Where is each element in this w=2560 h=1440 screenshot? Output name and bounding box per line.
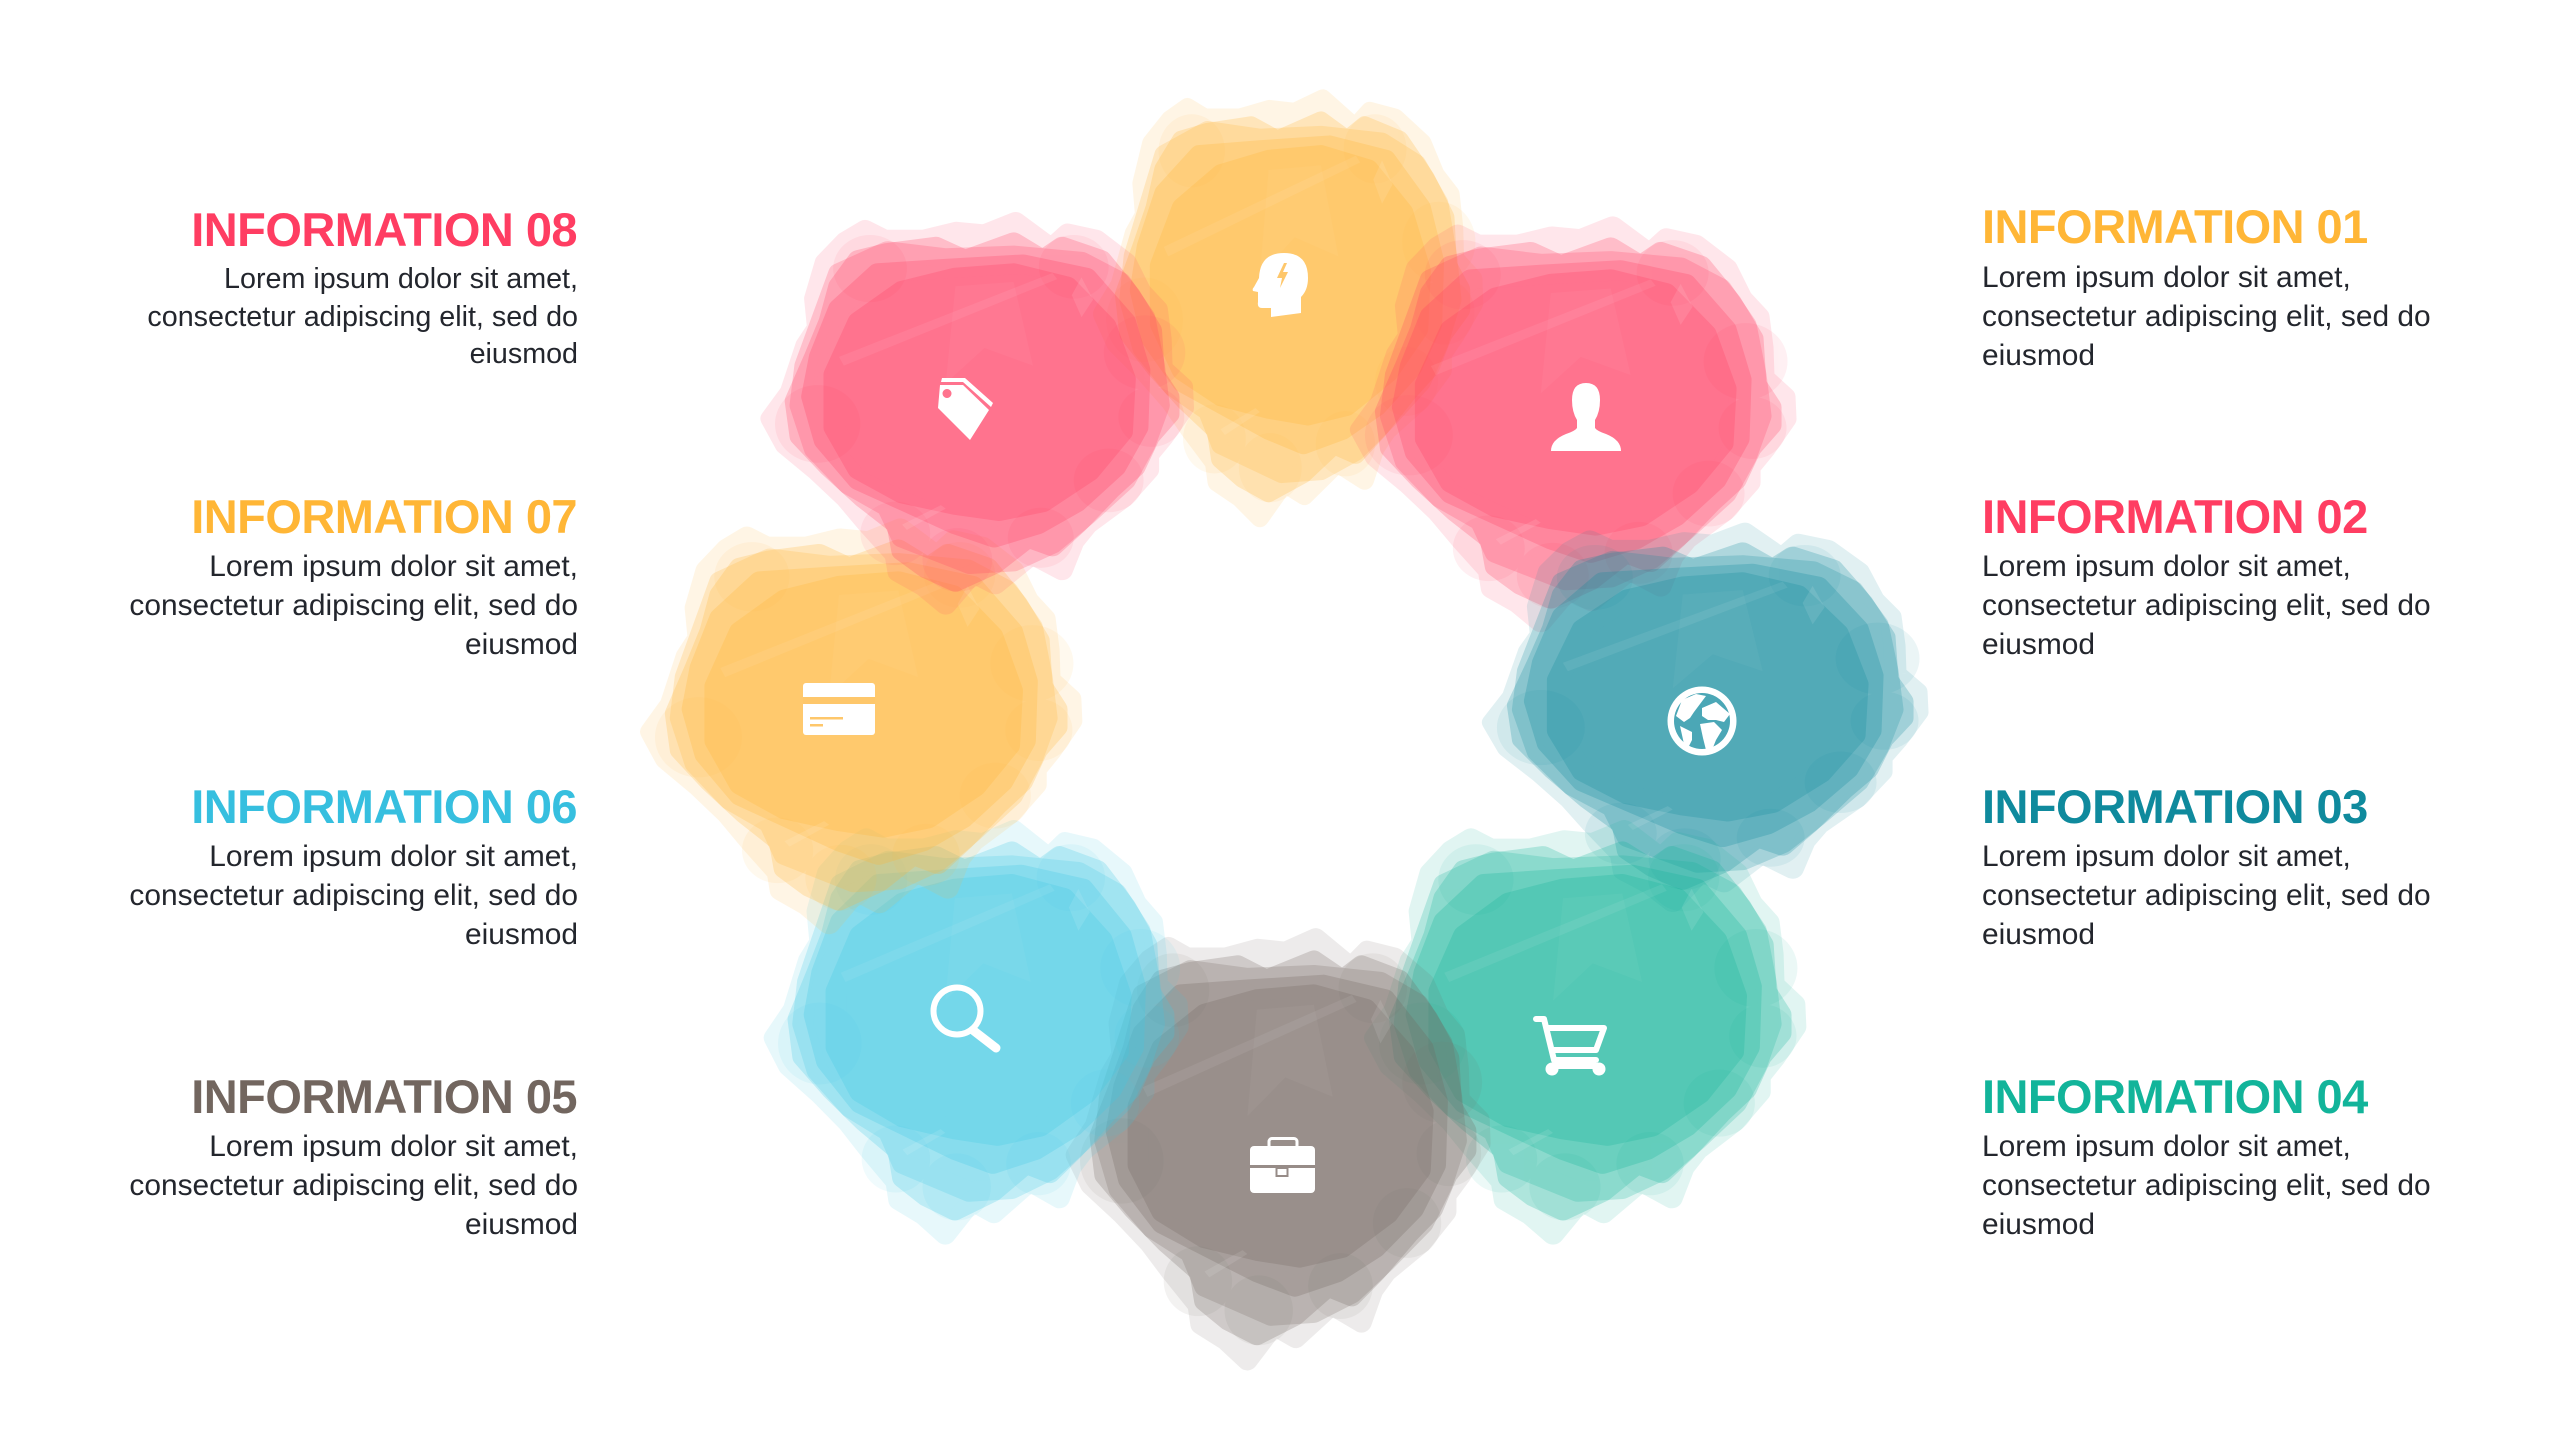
text block: information 01: Lorem ipsum dolor sit amet, bbox=[1982, 261, 2351, 294]
text block: information 01: consectetur adipiscing elit, sed do bbox=[1982, 300, 2431, 333]
text block: information 08: Lorem ipsum dolor sit amet, bbox=[224, 263, 578, 295]
icon: head with bolt bbox=[1253, 253, 1308, 317]
text block: information 04: eiusmod bbox=[1982, 1208, 2095, 1241]
brush blob bbox=[1103, 100, 1475, 517]
icon: briefcase bbox=[1250, 1138, 1315, 1193]
text block: information 06: eiusmod bbox=[465, 918, 578, 951]
segment 08: pink left bbox=[771, 222, 1185, 605]
segment 04: green bbox=[1375, 830, 1797, 1234]
text block: information 06: consectetur adipiscing elit, sed do bbox=[129, 879, 578, 912]
brush blob bbox=[1076, 939, 1482, 1360]
text block: information 04: Lorem ipsum dolor sit amet, bbox=[1982, 1130, 2351, 1163]
text block: information 04: INFORMATION 04 bbox=[1982, 1070, 2368, 1123]
text block: information 07 bbox=[129, 490, 578, 661]
blob ring bbox=[651, 100, 1920, 1360]
text block: information 08: consectetur adipiscing elit, sed do bbox=[147, 301, 578, 333]
text block: information 07: eiusmod bbox=[465, 628, 578, 661]
segment 05: brown bbox=[1076, 939, 1482, 1360]
text block: information 05: eiusmod bbox=[465, 1208, 578, 1241]
text block: information 01 bbox=[1982, 200, 2431, 372]
brush blob bbox=[1375, 830, 1797, 1234]
icon: person bbox=[1551, 383, 1621, 451]
text block: information 06: Lorem ipsum dolor sit amet, bbox=[209, 840, 578, 873]
brush blob bbox=[1361, 226, 1788, 622]
text block: information 02: eiusmod bbox=[1982, 628, 2095, 661]
text block: information 08 bbox=[147, 203, 578, 370]
text block: information 04 bbox=[1982, 1070, 2431, 1241]
icon: globe bbox=[1668, 686, 1736, 756]
text block: information 01: eiusmod bbox=[1982, 339, 2095, 372]
text block: information 05: consectetur adipiscing elit, sed do bbox=[129, 1169, 578, 1202]
segment 02: pink right bbox=[1361, 226, 1788, 622]
icon: credit card bbox=[803, 683, 875, 735]
icon: shopping cart bbox=[1536, 1019, 1604, 1072]
text block: information 03: consectetur adipiscing elit, sed do bbox=[1982, 879, 2431, 912]
brush blob bbox=[651, 528, 1073, 924]
text block: information 07: Lorem ipsum dolor sit amet, bbox=[209, 550, 578, 583]
brush blob bbox=[774, 830, 1180, 1234]
text block: information 07: consectetur adipiscing elit, sed do bbox=[129, 589, 578, 622]
text block: information 06 bbox=[129, 780, 578, 951]
brush blob bbox=[771, 222, 1185, 605]
text block: information 07: INFORMATION 07 bbox=[191, 490, 577, 543]
text block: information 08: INFORMATION 08 bbox=[191, 203, 577, 256]
segment 06: blue bbox=[774, 830, 1180, 1234]
text block: information 06: INFORMATION 06 bbox=[191, 780, 577, 833]
brush blob bbox=[1493, 532, 1920, 903]
icon: price tag bbox=[938, 378, 993, 440]
text block: information 04: consectetur adipiscing elit, sed do bbox=[1982, 1169, 2431, 1202]
text block: information 03: eiusmod bbox=[1982, 918, 2095, 951]
text block: information 05: INFORMATION 05 bbox=[191, 1070, 577, 1123]
text block: information 02 bbox=[1982, 490, 2431, 661]
text block: information 02: consectetur adipiscing elit, sed do bbox=[1982, 589, 2431, 622]
text block: information 02: Lorem ipsum dolor sit amet, bbox=[1982, 550, 2351, 583]
text block: information 03: INFORMATION 03 bbox=[1982, 780, 2368, 833]
text block: information 03 bbox=[1982, 780, 2431, 951]
text block: information 05: Lorem ipsum dolor sit amet, bbox=[209, 1130, 578, 1163]
text block: information 08: eiusmod bbox=[470, 338, 578, 370]
segment 03: teal bbox=[1493, 532, 1920, 903]
segment 01: yellow top bbox=[1103, 100, 1475, 517]
text block: information 03: Lorem ipsum dolor sit amet, bbox=[1982, 840, 2351, 873]
text block: information 05 bbox=[129, 1070, 578, 1241]
icon: magnifier bbox=[934, 988, 996, 1048]
text block: information 01: INFORMATION 01 bbox=[1982, 200, 2368, 253]
text block: information 02: INFORMATION 02 bbox=[1982, 490, 2368, 543]
segment 07: yellow left bbox=[651, 528, 1073, 924]
